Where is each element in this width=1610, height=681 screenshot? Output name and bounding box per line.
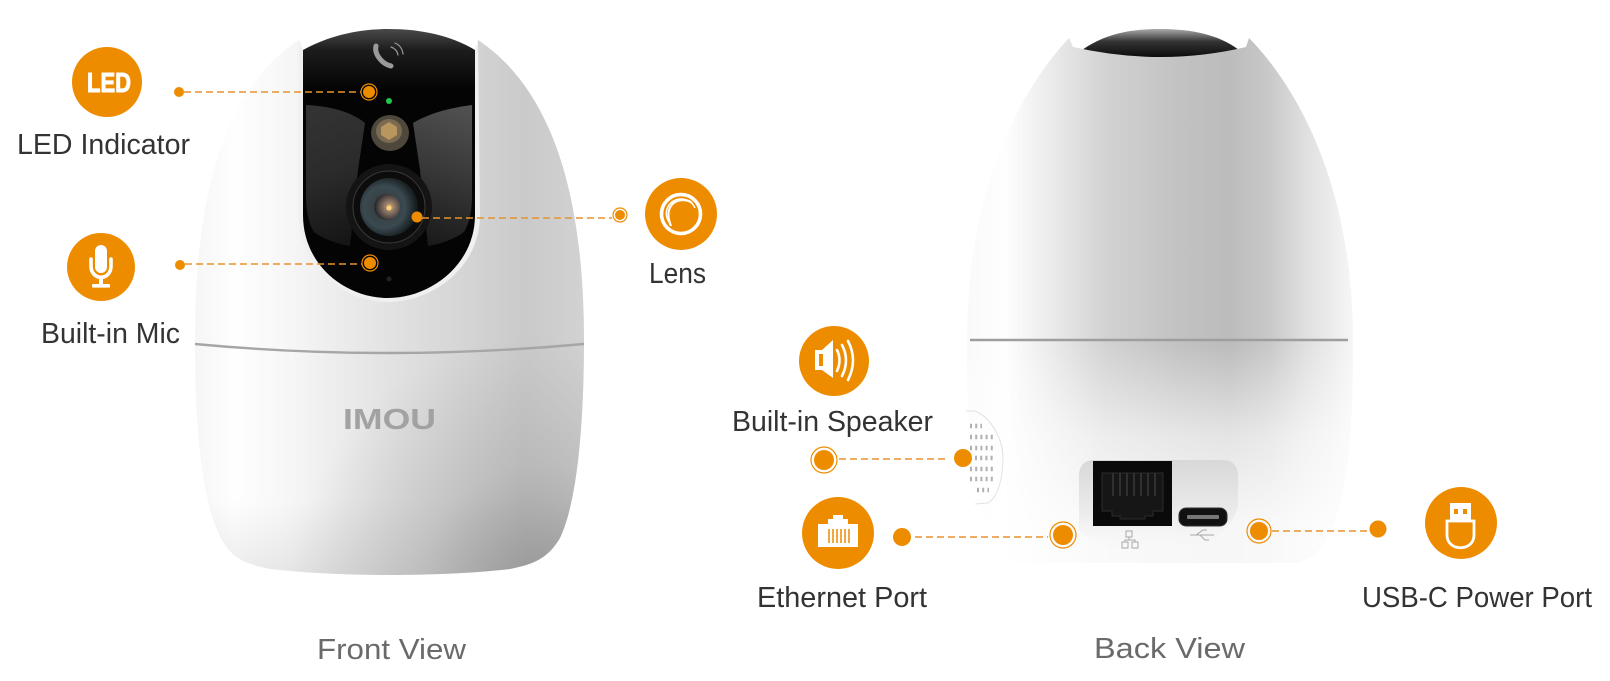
- label: LED Indicator: LED Indicator: [17, 129, 190, 161]
- icon: usb stick: [1425, 487, 1497, 559]
- network symbol: [1122, 531, 1138, 548]
- camera lens: [346, 164, 432, 250]
- usb-c socket: [1179, 508, 1227, 526]
- camera body back: [967, 38, 1353, 563]
- body seam line: [970, 339, 1348, 341]
- label: Built-in Speaker: Built-in Speaker: [732, 406, 933, 438]
- port recess: [1079, 460, 1238, 552]
- heading: Back View: Back View: [1094, 633, 1246, 665]
- icon: LED: [72, 47, 142, 117]
- left gloss panel: [306, 105, 365, 246]
- right gloss panel: [413, 105, 472, 246]
- leader line: usb: [1247, 519, 1386, 543]
- green LED indicator: [386, 98, 392, 104]
- callout: USB-C Power Port: [1247, 487, 1592, 614]
- icon: LED: LED: [87, 67, 131, 98]
- body seam line: [195, 344, 584, 353]
- lower body fade: [1026, 364, 1346, 563]
- label: Ethernet Port: Ethernet Port: [757, 582, 927, 614]
- ethernet socket: [1093, 461, 1172, 526]
- speaker grille: [966, 411, 1003, 504]
- body bottom shading: [220, 533, 444, 575]
- panel: back view camera: [960, 29, 1360, 570]
- body lower right shading: [338, 395, 582, 575]
- infrared light: [371, 115, 409, 151]
- callout: Lens: [412, 178, 717, 290]
- black camera window: [303, 29, 475, 298]
- leader line: lens: [412, 208, 627, 222]
- label: Built-in Mic: Built-in Mic: [41, 318, 180, 350]
- callout: Ethernet Port: [757, 497, 1076, 614]
- imou logo: IMOU: [343, 404, 436, 436]
- camera body front: [195, 40, 584, 575]
- window rim: [299, 40, 480, 302]
- mic hole: [386, 276, 392, 282]
- callout: LED indicator: [17, 47, 377, 161]
- icon: phone symbol: [376, 43, 403, 66]
- icon: microphone: [67, 233, 135, 301]
- label: Lens: Lens: [649, 258, 706, 290]
- black dome back: [1082, 29, 1239, 60]
- leader line: ethernet: [893, 522, 1076, 548]
- leader line: LED: [174, 84, 377, 100]
- label: USB-C Power Port: USB-C Power Port: [1362, 582, 1592, 614]
- callout: Built-in Mic: [41, 233, 378, 350]
- icon: lens rings: [645, 178, 717, 250]
- leader line: mic: [175, 255, 378, 271]
- panel: front view camera: [190, 29, 590, 580]
- heading: Front View: Front View: [317, 634, 467, 666]
- icon: speaker: [799, 326, 869, 396]
- usb symbol: [1190, 530, 1214, 540]
- leader line: speaker: [811, 447, 972, 473]
- callout: Built-in Speaker: [732, 326, 972, 473]
- icon: ethernet: [802, 497, 874, 569]
